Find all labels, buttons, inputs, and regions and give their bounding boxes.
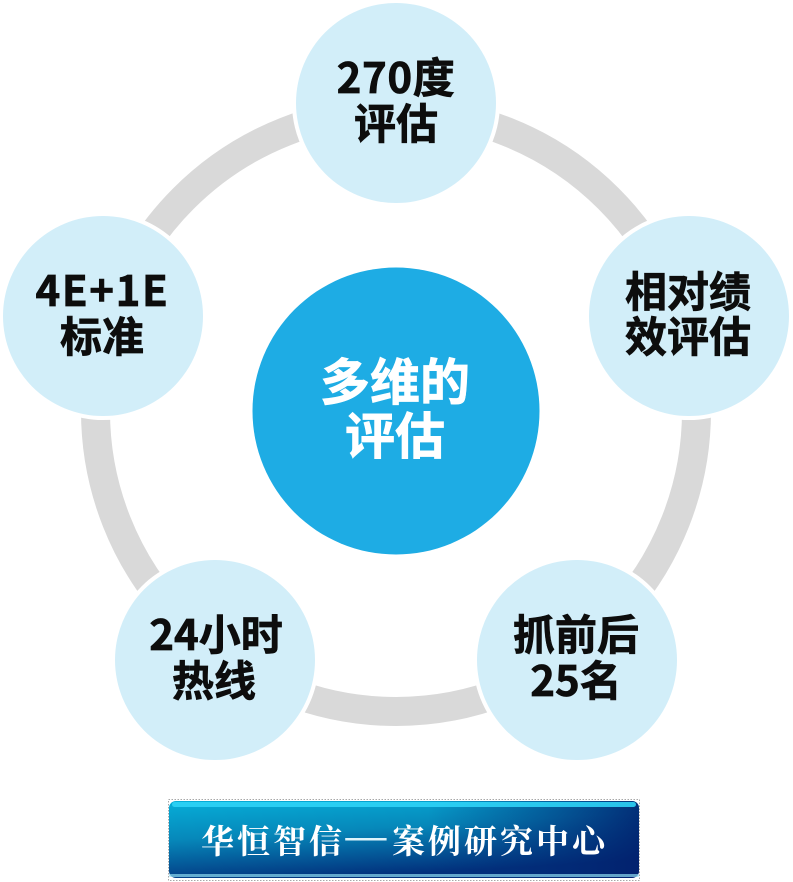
node: 270度评估 <box>296 3 496 203</box>
node: 相对绩效评估: 相对绩 <box>625 259 751 320</box>
node: 相对绩效评估: 效评估 <box>625 304 751 365</box>
central circle: 评估 <box>345 397 445 469</box>
node: 24小时热线 <box>115 560 315 760</box>
node: 24小时热线: 热线 <box>172 648 256 709</box>
ring connecting the circles <box>96 110 696 712</box>
banner: 华恒智信案例研究中心: 华恒智信 <box>201 816 345 863</box>
node: 相对绩效评估 <box>589 216 789 416</box>
banner: 华恒智信案例研究中心: 案例研究中心 <box>392 816 609 863</box>
node: 4E+1E标准: 4E+1E <box>35 258 170 319</box>
banner: 华恒智信案例研究中心: — <box>343 793 389 868</box>
node: 抓前后25名 <box>477 560 677 760</box>
central circle <box>252 268 540 554</box>
central circle: 多维的 <box>320 343 470 415</box>
node: 4E+1E标准 <box>3 216 203 416</box>
node: 270度评估: 270度 <box>337 45 455 106</box>
node: 抓前后25名: 25名 <box>530 648 622 709</box>
node: 270度评估: 评估 <box>354 91 438 152</box>
node: 4E+1E标准: 标准 <box>60 304 144 365</box>
banner: 华恒智信案例研究中心 <box>168 793 640 880</box>
node: 抓前后25名: 抓前后 <box>513 602 639 663</box>
node: 24小时热线: 24小时 <box>149 602 283 663</box>
